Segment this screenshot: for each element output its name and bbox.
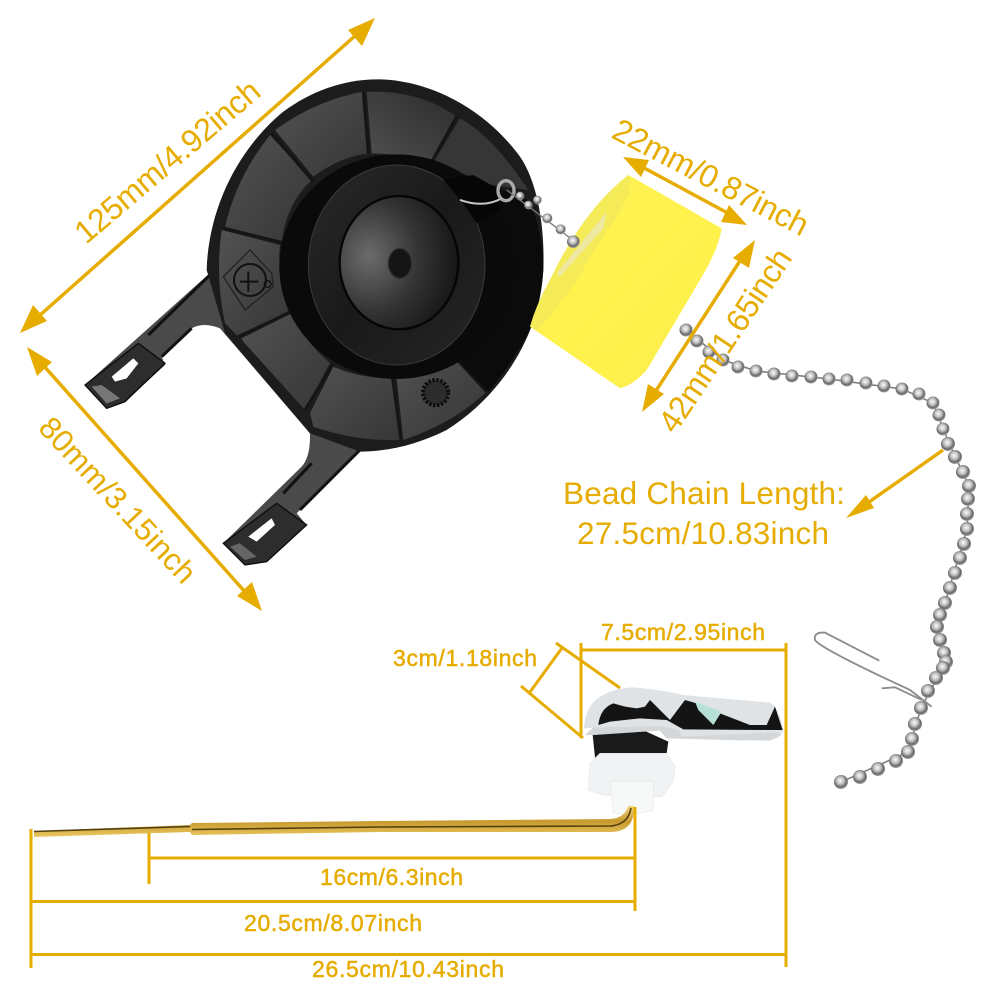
disc base <box>207 79 544 452</box>
dimension: 16cm: 16cm/6.3inch <box>320 864 463 890</box>
arm shadows <box>148 273 360 510</box>
diamond logo <box>223 250 273 310</box>
arm body <box>85 270 370 565</box>
float chain end <box>567 235 580 248</box>
threaded stem <box>610 782 653 815</box>
lower clip <box>223 503 307 565</box>
float body <box>530 175 722 388</box>
white nut <box>588 753 675 797</box>
chrome lower lip <box>585 726 782 741</box>
yellow float <box>530 175 722 388</box>
dimension: arm spacing: 80mm/3.15inch <box>32 410 203 590</box>
arrow: to chain <box>846 450 943 518</box>
bead chain length label: 27.5cm/10.83inch <box>577 515 829 551</box>
stamp <box>423 380 448 405</box>
upper clip <box>85 343 165 408</box>
flapper disc <box>207 79 544 452</box>
clasp tab <box>443 175 500 223</box>
radial ribs <box>223 92 487 440</box>
dimension: arm spacing <box>27 347 262 611</box>
inner dark well <box>279 154 514 379</box>
long bead chain <box>680 324 976 789</box>
short chain from flapper to float <box>460 181 575 242</box>
dimension: 20.5cm <box>31 829 635 968</box>
dark right side of disc <box>448 170 543 392</box>
bead chain length label: Bead Chain Length: <box>563 475 845 511</box>
dimension: handle width: 3cm/1.18inch <box>393 645 537 671</box>
dimension: float diameter: 42mm/1.65inch <box>651 242 799 439</box>
brass rod <box>34 806 634 837</box>
chrome handle <box>584 687 783 741</box>
dimension: handle length <box>581 619 786 967</box>
centre screw <box>388 248 412 278</box>
dimension: disc diameter: 125mm/4.92inch <box>67 73 267 250</box>
bead chain length label <box>563 450 943 551</box>
black spacer block <box>593 731 668 757</box>
dimension: 26.5cm: 26.5cm/10.43inch <box>312 956 504 982</box>
dimension: 16cm <box>149 807 635 911</box>
dimension: handle length: 7.5cm/2.95inch <box>601 619 765 645</box>
dimension: 20.5cm: 20.5cm/8.07inch <box>244 910 422 936</box>
wire hook <box>815 633 932 707</box>
grey sectors <box>219 92 528 440</box>
mounting arms <box>85 270 370 565</box>
chrome reflections <box>598 700 783 730</box>
handle lever <box>584 687 783 815</box>
dimension: disc diameter <box>20 18 375 333</box>
hub dome <box>340 196 458 329</box>
float label patch <box>557 212 607 277</box>
dimension: float height: 22mm/0.87inch <box>607 111 815 243</box>
dimension: handle width <box>393 643 620 738</box>
float end face <box>530 175 630 331</box>
hub ring <box>308 165 485 365</box>
